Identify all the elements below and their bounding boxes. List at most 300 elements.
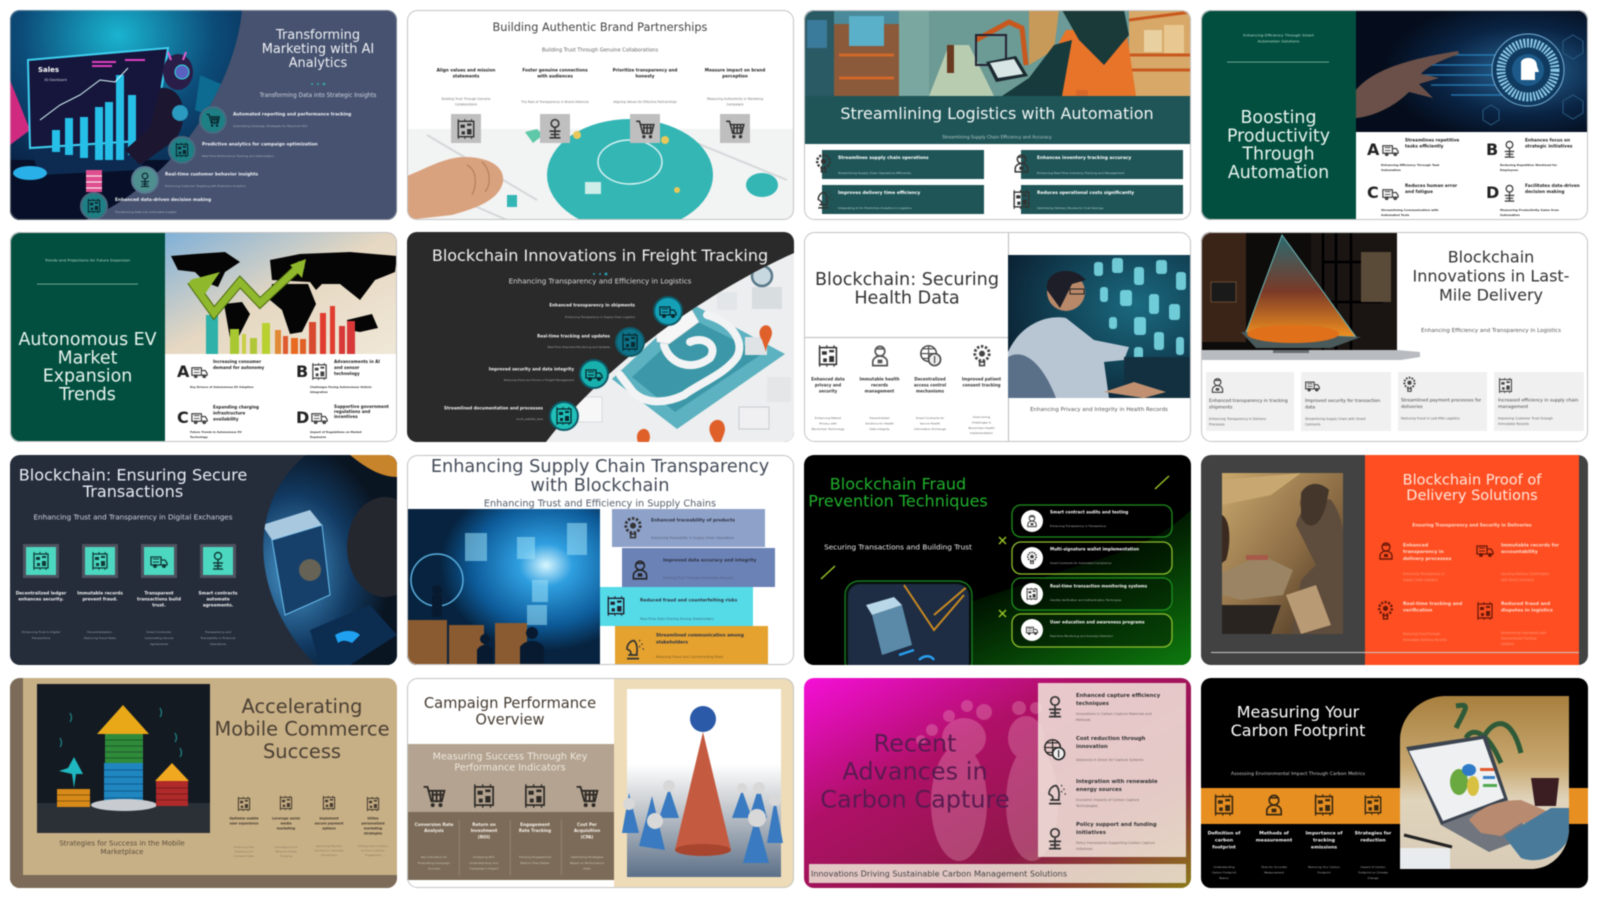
columns: partnership points: honesty bbox=[636, 74, 655, 78]
columns: four icon tiles with benefits: Smart contracts bbox=[199, 590, 238, 596]
columns: partnership points: with audiences bbox=[537, 74, 573, 78]
grid: A B C D drivers: Expansion bbox=[310, 435, 326, 439]
columns: health data features: Overcoming bbox=[973, 415, 990, 419]
panel: Blockchain Securing Health Data: Health Data bbox=[854, 288, 960, 308]
columns: mobile commerce strategies bbox=[229, 796, 389, 858]
columns: four icon tiles with benefits: Immutable records bbox=[77, 590, 123, 596]
grid: A B C D drivers: demand for autonomy bbox=[213, 365, 264, 370]
panel: Streamlining Logistics with Automation bbox=[804, 10, 1191, 220]
panel: Boosting Productivity Through Automation: Through bbox=[1241, 145, 1315, 165]
staggered benefit cards: Enhanced traceability of products bbox=[651, 518, 735, 524]
panel: Autonomous EV Market Expansion Trends bbox=[10, 232, 397, 442]
columns: partnership points: Collaborations bbox=[455, 103, 478, 107]
columns: health data features: Decentralized bbox=[914, 376, 946, 382]
list: four insights with round icons: Predictive analytics for campaign optimization bbox=[202, 142, 318, 148]
cards: four last-mile benefits: Enhancing Transparency in Delivery bbox=[1209, 417, 1266, 421]
cards: four last-mile benefits: Reducing Fraud in Last-Mile Logistics bbox=[1401, 416, 1460, 420]
illustration: isometric freight conveyor bbox=[537, 252, 794, 451]
columns: health data features: records bbox=[871, 382, 889, 388]
columns: partnership points: Prioritize transparency and bbox=[613, 68, 677, 72]
cards: four last-mile benefits: Improved security for transaction bbox=[1305, 398, 1380, 404]
list: fraud prevention pills: Identity Verification and Authentication Techniques bbox=[1050, 598, 1122, 602]
list: carbon capture advances: innovation bbox=[1076, 744, 1108, 750]
grid: A B C D drivers: Technology bbox=[190, 435, 208, 439]
columns: four KPIs bbox=[415, 784, 604, 875]
staggered benefit cards: Reducing Fraud and Counterfeiting Risks bbox=[656, 655, 723, 659]
grid: four delivery benefits: Immutable records for bbox=[1501, 542, 1560, 548]
panel: Accelerating Mobile Commerce Success: Success bbox=[263, 740, 341, 763]
panel: Blockchain Ensuring Secure Transactions: Blockchain: Ensuring Secure bbox=[19, 466, 247, 484]
grid: A B C D drivers: infrastructure bbox=[213, 410, 246, 416]
panel: Accelerating Mobile Commerce Success: Accelerating bbox=[242, 695, 362, 718]
panel: Blockchain Proof of Delivery Solutions bbox=[1201, 455, 1588, 665]
grid: A B C D benefits: Automated Tools bbox=[1381, 213, 1410, 217]
illustration: warehouse worker with tablet bbox=[804, 10, 1191, 96]
list: four insights with round icons: Enhancing Customer Targeting with Predictive Analytics bbox=[165, 184, 246, 188]
grid: A B C D benefits bbox=[1367, 138, 1580, 217]
list: carbon capture advances: Advances in Direct Air Capture Systems bbox=[1076, 758, 1144, 762]
columns: carbon metrics: footprint bbox=[1212, 844, 1237, 850]
illustration: analytics robot bbox=[10, 10, 250, 220]
list: carbon capture advances: Technologies bbox=[1075, 804, 1098, 808]
columns: mobile commerce strategies: media bbox=[280, 822, 292, 826]
grid: four delivery benefits: Real-time tracking and bbox=[1403, 601, 1462, 607]
grid: A B C D benefits: Automation bbox=[1500, 213, 1520, 217]
photo: delivery handover bbox=[1222, 473, 1343, 634]
illustration: coin stacks with arrows bbox=[37, 684, 210, 833]
grid: A B C D drivers: availability bbox=[213, 416, 239, 422]
columns: four icon tiles with benefits: Automating Secure bbox=[145, 636, 174, 640]
panel: Enhancing Supply Chain Transparency with Blockchain: with Blockchain bbox=[531, 476, 669, 496]
decorative accents bbox=[821, 476, 1169, 617]
list: four freight benefits: kunit_subtitle_here bbox=[516, 417, 543, 421]
panel: Accelerating Mobile Commerce Success: Strategies for Success in the Mobile bbox=[59, 840, 185, 848]
panel: Campaign Performance Overview: Measuring Success Through Key bbox=[433, 752, 588, 762]
grid: A B C D drivers: regulations and bbox=[334, 409, 370, 414]
list: four freight benefits: Reducing Fraud and Errors in Freight Management bbox=[504, 378, 575, 382]
columns: mobile commerce strategies: Optimize mobile bbox=[229, 816, 259, 820]
columns: four KPIs: Analysis bbox=[424, 828, 444, 833]
grid: A B C D drivers: Challenges Facing Autonomous Vehicle bbox=[310, 385, 372, 389]
columns: carbon metrics: Definition of bbox=[1208, 830, 1241, 836]
columns: mobile commerce strategies: secure payment bbox=[315, 822, 344, 826]
list: carbon capture advances: Initiatives bbox=[1076, 847, 1093, 851]
cards: four last-mile benefits: Contracts bbox=[1305, 422, 1321, 426]
panel: Autonomous EV Market Expansion Trends: Trends bbox=[58, 385, 116, 405]
columns: four icon tiles with benefits bbox=[16, 544, 238, 646]
columns: mobile commerce strategies: Optimizing Payment bbox=[316, 844, 342, 848]
list: carbon capture advances: Methods bbox=[1076, 718, 1091, 722]
list: four freight benefits bbox=[444, 297, 682, 430]
columns: health data features: Privacy with bbox=[819, 422, 837, 426]
grid: A B C D drivers bbox=[177, 359, 389, 439]
list: carbon capture advances: initiatives bbox=[1076, 830, 1106, 836]
columns: health data features: security bbox=[819, 388, 837, 394]
columns: four icon tiles with benefits: Enhancing Trust in Digital bbox=[22, 630, 60, 634]
columns: health data features: Information Exchange bbox=[914, 427, 946, 431]
grid: A B C D benefits: Reduces human error bbox=[1405, 183, 1458, 189]
columns: health data features: management bbox=[865, 388, 894, 394]
columns: carbon metrics: Basics bbox=[1219, 876, 1229, 880]
columns: four KPIs: Analyzing ROI: bbox=[473, 855, 495, 859]
list: carbon capture advances: Policy support and funding bbox=[1076, 822, 1157, 828]
grid: A B C D benefits: Automation bbox=[1381, 168, 1401, 172]
columns: carbon metrics: Footprint bbox=[1317, 870, 1331, 874]
columns: four KPIs: Metrics That Matter bbox=[520, 861, 550, 865]
grid: A B C D benefits: Streamlining Communication with bbox=[1381, 208, 1438, 212]
panel: Autonomous EV Market Expansion Trends: Market bbox=[58, 348, 118, 368]
illustration: world map with growth arrow and bars bbox=[165, 232, 397, 354]
list: four insights with round icons bbox=[81, 107, 351, 219]
grid: four delivery benefits: Enhanced bbox=[1403, 542, 1428, 548]
columns: mobile commerce strategies: marketing bbox=[277, 826, 296, 830]
grid: four delivery benefits: transparency in bbox=[1403, 549, 1444, 555]
columns: four KPIs: Cost Per bbox=[577, 822, 598, 827]
grid: four delivery benefits: Systems bbox=[1501, 642, 1515, 646]
panel: Blockchain Fraud Prevention Techniques: Blockchain Fraud bbox=[830, 474, 966, 494]
panel: Building Authentic Brand Partnerships: Building Trust Through Genuine Collaborations bbox=[542, 48, 659, 54]
grid: A B C D benefits: C bbox=[1367, 183, 1379, 202]
grid: A B C D benefits: Enhances focus on bbox=[1525, 138, 1570, 144]
columns: carbon metrics: Change bbox=[1367, 876, 1379, 880]
columns: health data features: Challenges in bbox=[972, 420, 991, 424]
columns: four icon tiles with benefits: Agreements bbox=[150, 642, 169, 646]
list: fraud prevention pills: Smart Contracts for Automated Compliance bbox=[1050, 561, 1112, 565]
columns: health data features: Secure Health bbox=[920, 422, 940, 426]
grid: A B C D benefits: tasks efficiently bbox=[1405, 144, 1444, 150]
list: carbon capture advances: Enhanced capture efficiency bbox=[1076, 693, 1161, 699]
cards: four automation benefits: Enhances inventory tracking accuracy bbox=[1037, 155, 1131, 161]
illustration: digital warehouse with silhouettes bbox=[407, 509, 600, 665]
panel: Streamlining Logistics with Automation: Streamlining Supply Chain Efficiency and Accuracy bbox=[942, 134, 1052, 140]
panel: Recent Advances in Carbon Capture: Advances in bbox=[842, 758, 988, 786]
grid: A B C D benefits: Measuring Productivity Gains from bbox=[1500, 208, 1559, 212]
columns: health data features: Immutable health bbox=[859, 376, 900, 382]
panel: Blockchain Innovations in Last-Mile Delivery: Enhancing Efficiency and Transparency in Logistics bbox=[1421, 328, 1561, 334]
panel: Measuring Your Carbon Footprint: Carbon Footprint bbox=[1231, 721, 1365, 740]
list: four insights with round icons: Enhanced data-driven decision making bbox=[115, 197, 211, 203]
grid: A B C D drivers: Key Drivers of Autonomous EV Adoption bbox=[190, 385, 253, 389]
columns: health data features bbox=[811, 345, 1001, 435]
grid: four delivery benefits: Decentralized Tracking bbox=[1501, 636, 1536, 640]
panel: Recent Advances in Carbon Capture: Carbon Capture bbox=[820, 786, 1010, 814]
columns: carbon metrics: Strategies for bbox=[1355, 830, 1392, 836]
grid: A B C D drivers: Supportive government bbox=[334, 404, 389, 409]
cards: four last-mile benefits: deliveries bbox=[1401, 404, 1423, 410]
grid: A B C D benefits: Reducing Repetitive Workload for bbox=[1500, 163, 1558, 167]
cards: four automation benefits: Enhancing Real-Time Inventory Tracking and Management bbox=[1037, 171, 1125, 175]
list: four freight benefits: Enhancing Transparency in Supply Chain Logistics bbox=[565, 315, 636, 319]
panel: Blockchain Fraud Prevention Techniques: Securing Transactions and Building Trust bbox=[824, 542, 972, 552]
columns: health data features: access control bbox=[914, 382, 947, 388]
panel: Accelerating Mobile Commerce Success: Mobile Commerce bbox=[214, 718, 390, 740]
columns: carbon metrics: Carbon Footprint bbox=[1212, 870, 1237, 874]
grid: A B C D benefits: Streamlines repetitive bbox=[1405, 138, 1459, 144]
cards: four last-mile benefits: Streamlined payment processes for bbox=[1401, 398, 1481, 404]
columns: four icon tiles with benefits: agreements. bbox=[203, 602, 234, 608]
columns: four KPIs: Acquisition bbox=[574, 828, 600, 833]
columns: four icon tiles with benefits: Operations bbox=[210, 642, 227, 646]
grid: A B C D benefits: A bbox=[1367, 140, 1380, 159]
columns: mobile commerce strategies: Solutions for Seamless bbox=[314, 849, 344, 853]
panel: Blockchain Innovations in Freight Tracking: Blockchain Innovations in Freight Tracking bbox=[432, 246, 768, 265]
panel: Blockchain Securing Health Data: Blockchain: Securing bbox=[815, 270, 999, 290]
columns: four icon tiles with benefits: Reducing Fraud Risks bbox=[84, 636, 116, 640]
columns: four icon tiles with benefits: automate bbox=[206, 596, 230, 602]
columns: mobile commerce strategies: Experience for bbox=[235, 850, 254, 854]
list: carbon capture advances: Economic Impacts of Carbon Capture bbox=[1076, 798, 1139, 802]
cards: four last-mile benefits: Improving Customer Trust through bbox=[1498, 416, 1553, 420]
grid: four delivery benefits: Securing Delivery Confirmation bbox=[1501, 572, 1549, 576]
columns: four KPIs: Tracking Engagement bbox=[518, 855, 552, 859]
grid: A B C D drivers: technology bbox=[334, 371, 360, 376]
grid: A B C D benefits: Employees bbox=[1500, 168, 1518, 172]
cards: four automation benefits bbox=[817, 150, 1183, 214]
cards: four automation benefits: Optimizing Delivery Routes for Cost Savings bbox=[1037, 206, 1104, 210]
grid: A B C D drivers: Advancements in AI bbox=[334, 359, 380, 364]
illustration: cube in rounded frame bbox=[845, 581, 972, 675]
grid: four delivery benefits: with Smart Contracts bbox=[1501, 578, 1534, 582]
grid: four delivery benefits: accountability bbox=[1501, 549, 1538, 555]
cards: four automation benefits: Integrating AI for Predictive Analytics in Logistics bbox=[838, 206, 912, 210]
list: carbon capture advances: techniques bbox=[1076, 701, 1109, 707]
panel: Enhancing Supply Chain Transparency with Blockchain: Enhancing Trust and Efficiency in Supply Chains bbox=[484, 498, 716, 510]
list: four insights with round icons: Automating Campaign Strategies for Maximum ROI bbox=[233, 124, 307, 128]
columns: four icon tiles with benefits: trust. bbox=[152, 602, 166, 608]
columns: four KPIs: Optimizing Strategies bbox=[571, 855, 604, 859]
grid: four delivery benefits bbox=[1379, 542, 1560, 646]
columns: four KPIs: Campaign's Impact bbox=[470, 867, 499, 871]
columns: mobile commerce strategies: Implement bbox=[319, 816, 339, 820]
columns: four icon tiles with benefits: Decentralization: bbox=[87, 630, 113, 634]
columns: carbon metrics: tracking bbox=[1313, 837, 1335, 843]
list: carbon capture advances: Innovations in Carbon Capture Materials and bbox=[1076, 712, 1152, 716]
illustration: glowing blockchain cube in ring bbox=[262, 454, 398, 666]
panel: Blockchain Fraud Prevention Techniques: Prevention Techniques bbox=[808, 492, 988, 510]
columns: partnership points: perception bbox=[722, 74, 748, 78]
illustration: strategy map with hand bbox=[407, 119, 794, 231]
staggered benefit cards bbox=[600, 509, 775, 665]
list: fraud prevention pills: Enhancing Transparency in Transactions bbox=[1050, 524, 1107, 528]
list: fraud prevention pills: Smart contract audits and testing bbox=[1050, 510, 1128, 514]
cards: four last-mile benefits: Increased efficiency in supply chain bbox=[1498, 398, 1578, 404]
columns: four KPIs: Engagement bbox=[520, 822, 550, 827]
panel: Boosting Productivity Through Automation: Productivity bbox=[1227, 126, 1330, 146]
panel: Blockchain Ensuring Secure Transactions: Transactions bbox=[82, 482, 183, 501]
list: carbon capture advances: Cost reduction through bbox=[1076, 736, 1146, 742]
panel: Blockchain Innovations in Last-Mile Delivery bbox=[1201, 232, 1588, 442]
columns: carbon metrics: carbon bbox=[1215, 837, 1233, 843]
panel: Blockchain Proof of Delivery Solutions: Ensuring Transparency and Security in Deliveries bbox=[1412, 522, 1532, 528]
panel: Accelerating Mobile Commerce Success bbox=[10, 678, 397, 888]
panel: Blockchain Innovations in Freight Tracking: Enhancing Transparency and Efficiency in Logistics bbox=[509, 276, 692, 286]
columns: mobile commerce strategies: strategies bbox=[364, 832, 382, 836]
columns: health data features: Blockchain Health bbox=[968, 426, 995, 430]
columns: four icon tiles with benefits: enhances security. bbox=[18, 596, 64, 602]
columns: four icon tiles with benefits: Transactions bbox=[31, 636, 51, 640]
grid: four delivery benefits: Streamlining Operations with bbox=[1501, 631, 1546, 635]
columns: health data features: Solutions for Health bbox=[865, 422, 894, 426]
columns: carbon metrics: emissions bbox=[1311, 844, 1337, 850]
grid: four delivery benefits: disputes in logistics bbox=[1501, 608, 1553, 614]
photo: laptop with carbon footprint report bbox=[1400, 696, 1569, 869]
cards: four last-mile benefits: management bbox=[1498, 404, 1528, 410]
grid: four delivery benefits: verification bbox=[1403, 608, 1432, 614]
cards: four last-mile benefits: Processes bbox=[1209, 422, 1225, 426]
staggered benefit cards: Improved data accuracy and integrity bbox=[663, 558, 757, 564]
panel: Boosting Productivity Through Automation bbox=[1201, 10, 1588, 220]
grid: four delivery benefits: Enhancing Transparency in bbox=[1403, 572, 1445, 576]
columns: carbon metrics: Methods of bbox=[1259, 830, 1290, 836]
grid: A B C D drivers: C bbox=[177, 408, 189, 427]
columns: health data features: Enhanced data bbox=[811, 376, 845, 382]
columns: mobile commerce strategies: Utilizing Data Analytics bbox=[358, 844, 389, 848]
illustration: footprints bbox=[916, 700, 1058, 861]
columns: carbon metrics: Understanding bbox=[1213, 865, 1235, 869]
columns: carbon metrics: Impact of Carbon bbox=[1360, 865, 1386, 869]
staggered benefit cards: Real-Time Data Sharing Among Stakeholders bbox=[640, 617, 714, 621]
cards: four last-mile benefits: Immutable Records bbox=[1498, 422, 1529, 426]
panel: Enhancing Supply Chain Transparency with Blockchain: Enhancing Supply Chain Transparency bbox=[431, 457, 769, 477]
illustration: laptop with data pyramid bbox=[1201, 232, 1420, 360]
panel: Building Authentic Brand Partnerships: Building Authentic Brand Partnerships bbox=[493, 21, 708, 34]
columns: four KPIs: Success bbox=[428, 867, 440, 871]
columns: partnership points: statements bbox=[453, 74, 480, 78]
columns: mobile commerce strategies: Utilize bbox=[367, 816, 379, 820]
columns: mobile commerce strategies: Transactions bbox=[321, 853, 338, 857]
grid: A B C D benefits: D bbox=[1486, 183, 1499, 202]
staggered benefit cards: Building Trust Through Immutable Records bbox=[663, 576, 733, 580]
list: four freight benefits: Streamlined documentation and processes bbox=[444, 406, 544, 410]
staggered benefit cards: Enhancing Traceability in Supply Chain Operations bbox=[651, 536, 734, 540]
list: four insights with round icons: Real-time customer behavior insights bbox=[165, 172, 258, 178]
columns: four KPIs: Return on bbox=[472, 822, 496, 827]
columns: health data features: consent tracking bbox=[963, 382, 1001, 388]
panel: Blockchain Innovations in Freight Tracking bbox=[407, 232, 794, 451]
panel: Blockchain Ensuring Secure Transactions bbox=[10, 455, 423, 665]
columns: carbon metrics: reduction bbox=[1360, 837, 1386, 843]
cards: four last-mile benefits: Streamlining Supply Chain with Smart bbox=[1305, 417, 1366, 421]
columns: health data features: Data Integrity bbox=[869, 427, 890, 431]
grid: A B C D benefits: Enhancing Efficiency Through Task bbox=[1381, 163, 1440, 167]
cards: four last-mile benefits: data bbox=[1305, 404, 1315, 410]
illustration: hand reaching to AI interface bbox=[1356, 10, 1588, 132]
list: carbon capture advances: energy sources bbox=[1076, 787, 1122, 793]
panel: Blockchain Innovations in Last-Mile Delivery: Innovations in Last- bbox=[1413, 266, 1569, 286]
columns: health data features: Decentralized bbox=[869, 416, 890, 420]
grid: four delivery benefits: delivery processes bbox=[1403, 556, 1452, 562]
panel: Campaign Performance Overview: Performance Indicators bbox=[454, 762, 566, 774]
panel: Streamlining Logistics with Automation: Streamlining Logistics with Automation bbox=[840, 104, 1154, 123]
grid: A B C D drivers: Impact of Regulations on Market bbox=[310, 430, 362, 434]
list: fraud prevention pills: Real-time transaction monitoring systems bbox=[1050, 584, 1148, 588]
columns: health data features: mechanisms bbox=[916, 388, 945, 394]
panel: Campaign Performance Overview: Campaign Performance bbox=[424, 695, 596, 712]
panel: Blockchain Securing Health Data bbox=[804, 232, 1191, 442]
grid: four delivery benefits: Reduced fraud and bbox=[1501, 601, 1550, 607]
panel: Blockchain Ensuring Secure Transactions: Enhancing Trust and Transparency in Digital Exchanges bbox=[34, 512, 233, 522]
columns: mobile commerce strategies: user experience bbox=[230, 822, 258, 826]
cards: four automation benefits: Improves delivery time efficiency bbox=[838, 190, 920, 196]
cards: four last-mile benefits: shipments bbox=[1209, 404, 1233, 410]
panel: Recent Advances in Carbon Capture bbox=[804, 678, 1191, 888]
columns: health data features: Improved patient bbox=[962, 376, 1001, 382]
columns: mobile commerce strategies: Shopping bbox=[280, 854, 292, 858]
columns: four KPIs: Rate Tracking bbox=[519, 828, 551, 833]
columns: health data features: Blockchain Technology bbox=[812, 427, 845, 431]
panel: Boosting Productivity Through Automation: Automation Solutions bbox=[1258, 38, 1299, 43]
staggered benefit cards: Streamlined communication among bbox=[656, 632, 744, 638]
columns: four KPIs: Investment bbox=[471, 828, 497, 833]
panel: Enhancing Supply Chain Transparency with Blockchain bbox=[407, 455, 794, 665]
list: fraud prevention pills: Real-time Monitoring and Anomaly Detection bbox=[1050, 634, 1113, 638]
grid: A B C D benefits: decision making bbox=[1525, 189, 1564, 195]
panel: Recent Advances in Carbon Capture: Innovations Driving Sustainable Carbon Management Solutions bbox=[811, 868, 1067, 878]
illustration: analytics robot: 3D Dashboard bbox=[44, 78, 67, 82]
columns: partnership points: Measure impact on brand bbox=[705, 68, 765, 72]
grid: A B C D drivers: Increasing consumer bbox=[213, 359, 261, 364]
cards: four automation benefits: Reduces operational costs significantly bbox=[1037, 190, 1134, 196]
columns: mobile commerce strategies: Increased Sales bbox=[234, 854, 255, 858]
columns: four icon tiles with benefits: prevent fraud. bbox=[82, 596, 118, 602]
columns: four KPIs: Conversion Rate bbox=[415, 822, 454, 827]
columns: four KPIs: (ROI) bbox=[478, 834, 490, 839]
panel: Transforming Marketing with AI Analytics bbox=[10, 10, 397, 220]
grid: A B C D drivers: A bbox=[177, 362, 190, 381]
columns: carbon metrics: Measurement bbox=[1264, 870, 1285, 874]
list: four insights with round icons: Real-Time Performance Tracking and Optimization bbox=[202, 154, 274, 158]
list: four freight benefits: Enhanced transparency in shipments bbox=[549, 302, 636, 308]
columns: mobile commerce strategies: options bbox=[322, 826, 336, 830]
panel: Recent Advances in Carbon Capture: Recent bbox=[874, 730, 956, 758]
panel: Accelerating Mobile Commerce Success: Marketplace bbox=[101, 848, 143, 856]
columns: partnership points: Align values and mission bbox=[437, 68, 495, 72]
columns: four icon tiles with benefits: transactions build bbox=[137, 596, 181, 602]
panel: Transforming Marketing with AI Analytics: Marketing with AI bbox=[262, 42, 374, 57]
list: carbon capture advances bbox=[1045, 693, 1161, 851]
list: four freight benefits: Real-Time Shipment Monitoring and Updates bbox=[548, 345, 611, 349]
grid: four delivery benefits: Reducing Fraud through bbox=[1403, 632, 1440, 636]
columns: partnership points bbox=[437, 68, 765, 143]
columns: mobile commerce strategies: Enhancing User bbox=[234, 845, 255, 849]
columns: partnership points: Campaigns bbox=[726, 103, 744, 107]
staggered benefit cards: stakeholders bbox=[656, 640, 688, 646]
columns: mobile commerce strategies: Leveraging Social bbox=[275, 845, 298, 849]
columns: four icon tiles with benefits: Decentralized ledger bbox=[16, 590, 67, 596]
grid: A B C D drivers: Expanding charging bbox=[213, 404, 259, 410]
grid: A B C D drivers: D bbox=[296, 408, 309, 427]
grid: A B C D drivers: B bbox=[296, 362, 308, 381]
panel: Autonomous EV Market Expansion Trends: Expansion bbox=[43, 367, 132, 387]
panel: Blockchain Proof of Delivery Solutions: Delivery Solutions bbox=[1406, 488, 1538, 504]
panel: Building Authentic Brand Partnerships bbox=[407, 10, 794, 231]
columns: four KPIs: Key Indicators for bbox=[421, 855, 448, 859]
grid: A B C D drivers: Integration bbox=[310, 390, 328, 394]
columns: partnership points: The Role of Transparency in Brand Alliances bbox=[520, 100, 589, 104]
panel: Boosting Productivity Through Automation: Enhancing Efficiency Through Smart bbox=[1243, 32, 1314, 38]
columns: carbon metrics: Reducing Your Carbon bbox=[1308, 865, 1340, 869]
grid: four delivery benefits: Immutable Delivery Records bbox=[1403, 638, 1447, 642]
columns: health data features: Smart Contracts for bbox=[916, 416, 945, 420]
columns: four KPIs: Data bbox=[583, 867, 591, 871]
columns: health data features: privacy and bbox=[815, 382, 841, 388]
columns: health data features: Implementation bbox=[970, 431, 993, 435]
grid: A B C D drivers: incentives bbox=[334, 414, 358, 419]
panel: Campaign Performance Overview: Overview bbox=[475, 712, 545, 728]
grid: A B C D drivers: Future Trends in Autonomous EV bbox=[190, 430, 242, 434]
illustration: doctor with digital health icons bbox=[1008, 255, 1191, 398]
cards: four automation benefits: Streamlines supply chain operations bbox=[838, 155, 929, 161]
